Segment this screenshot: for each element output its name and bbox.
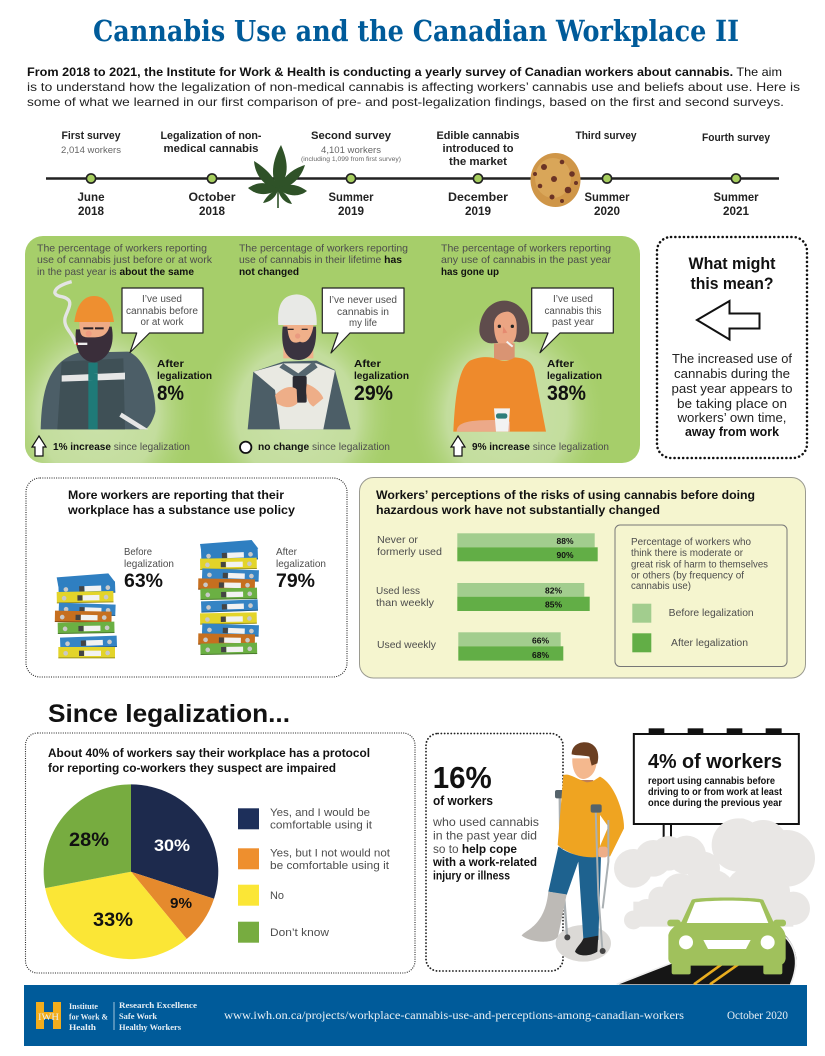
timeline dates: Summer: [328, 192, 374, 204]
text: panel 1 description: [37, 242, 213, 278]
stat: before legalization 63%: legalization: [124, 558, 174, 570]
heading: since legalization: Since legalization...: [48, 700, 290, 728]
speech bubble 1: or at work: [140, 317, 184, 328]
stat: after legalization 29%: 29%: [354, 382, 393, 405]
explanation text: [672, 352, 793, 439]
timeline labels above: Second survey: [311, 130, 392, 142]
panel: worker use statistics: [25, 236, 640, 463]
panel: impairment reporting protocol: [26, 733, 415, 973]
stat: before legalization 63%: Before: [124, 546, 152, 558]
icon: road: [617, 932, 796, 984]
timeline labels above: Edible cannabis: [436, 130, 520, 142]
intro paragraph: some of what we learned in our first comparison of pre- and post-legalization findings, based on the first and second surveys.: [27, 95, 784, 109]
bar chart: [376, 533, 598, 661]
heading: hazardous work have not substantially changed: [376, 503, 660, 517]
category labels: [376, 534, 442, 651]
timeline dates: 2019: [338, 206, 364, 218]
timeline dates: [78, 192, 759, 218]
stat: after legalization 29%: legalization: [354, 370, 409, 382]
pie labels: [69, 830, 192, 931]
footer: [24, 985, 807, 1046]
legend: Before legalization: [669, 608, 754, 619]
timeline dates: 2018: [199, 206, 226, 218]
timeline dates: Summer: [584, 192, 630, 204]
timeline dates: Summer: [714, 192, 759, 204]
text: 9% increase since legalization: 9% increase since legalization: [472, 441, 609, 453]
heading: More workers are reporting that their: [68, 488, 284, 502]
pie legend: No: [270, 890, 284, 902]
pie legend: comfortable using it: [270, 820, 372, 832]
explanation text: be taking place on: [677, 397, 787, 411]
timeline dates: 2021: [723, 206, 750, 218]
billboard text: report using cannabis before: [648, 776, 775, 787]
speech bubble 1: [122, 288, 203, 352]
timeline labels above: introduced to: [442, 143, 514, 155]
speech bubble 1: I’ve used: [142, 294, 182, 305]
speech bubble 2: [322, 288, 404, 353]
label: of workers: of workers: [433, 794, 493, 808]
bar labels: 82%: [545, 586, 562, 596]
explanation text: cannabis during the: [674, 367, 790, 381]
bar labels: [532, 536, 574, 660]
intro paragraph: From 2018 to 2021, the Institute for Work & Health is conducting a yearly survey of Canadian workers about cannabis. The aim: [27, 65, 782, 79]
pie legend: [238, 807, 390, 943]
icon: worker with white cap and phone: [248, 294, 351, 429]
timeline sublabels: [61, 145, 401, 163]
icon: binder stack before: [55, 573, 117, 658]
stat: after legalization 38%: [547, 358, 602, 405]
text: panel 2 description: The percentage of workers reporting: [239, 242, 408, 254]
timeline sublabels: 2,014 workers: [61, 145, 121, 156]
icon: binder stack after: [198, 540, 259, 655]
explanation text: past year appears to: [672, 382, 793, 396]
heading: [688, 255, 776, 293]
icon: cannabis leaf: [248, 145, 307, 208]
logo: Healthy Workers: [119, 1023, 181, 1032]
icon: exhaust smoke clouds: [614, 818, 815, 929]
speech bubble 3: [532, 288, 613, 353]
panel: perceptions of risk: [360, 478, 806, 678]
stat: before legalization 63%: [124, 546, 174, 592]
description: in the past year did: [433, 828, 537, 842]
icon: circle, no change: [240, 442, 251, 453]
stat: after legalization 79%: After: [276, 546, 297, 558]
billboard: [634, 728, 799, 838]
timeline labels above: Legalization of non-: [160, 130, 262, 142]
heading: workplace has a substance use policy: [67, 503, 295, 517]
timeline nodes: [86, 174, 741, 183]
text: panel 2 description: use of cannabis in their lifetime has: [239, 254, 402, 266]
heading: for reporting co-workers they suspect are impaired: [48, 761, 336, 775]
icon: left arrow: [697, 301, 760, 340]
timeline sublabels: (including 1,099 from first survey): [301, 157, 401, 163]
panel: substance use policy: [26, 478, 347, 677]
stat: after legalization 8%: legalization: [157, 370, 212, 382]
category labels: Used less: [376, 585, 420, 597]
stat: before legalization 63%: 63%: [124, 571, 163, 592]
logo: Health: [69, 1023, 97, 1032]
pie chart: [44, 784, 218, 959]
stat: after legalization 8%: [157, 358, 212, 405]
timeline labels above: Fourth survey: [702, 132, 771, 144]
category labels: Used weekly: [377, 639, 437, 651]
description: [432, 815, 539, 882]
text: panel 1 description: use of cannabis just before or at work: [37, 254, 213, 266]
heading: [48, 746, 370, 775]
text: panel 1 description: in the past year is about the same: [37, 266, 194, 278]
heading: About 40% of workers say their workplace has a protocol: [48, 746, 370, 760]
explanation text: away from work: [685, 425, 779, 439]
icon: up arrow, 9% increase: [451, 436, 465, 456]
description: who used cannabis: [432, 815, 539, 829]
timeline dates: October: [188, 192, 236, 204]
stat: after legalization 79%: legalization: [276, 558, 326, 570]
url: www.iwh.on.ca/projects/workplace-cannabis-use-and-perceptions-among-canadian-workers: [224, 1010, 685, 1022]
pie labels: 33%: [93, 910, 133, 931]
stat: after legalization 38%: 38%: [547, 382, 586, 405]
text: panel 1 description: The percentage of workers reporting: [37, 242, 207, 254]
heading: Workers’ perceptions of the risks of using cannabis before doing: [376, 488, 755, 502]
text: panel 3 description: has gone up: [441, 266, 499, 278]
bar labels: 90%: [556, 550, 574, 560]
legend: cannabis use): [631, 581, 691, 592]
timeline dates: 2019: [465, 206, 491, 218]
stat: after legalization 29%: [354, 358, 409, 405]
billboard text: once during the previous year: [648, 798, 782, 809]
bar labels: 88%: [556, 536, 574, 546]
speech bubble 3: cannabis this: [544, 306, 602, 317]
bar labels: 85%: [545, 600, 562, 610]
stat: after legalization 38%: legalization: [547, 370, 602, 382]
pie legend: Yes, and I would be: [270, 807, 370, 819]
legend: great risk of harm to themselves: [631, 560, 768, 570]
pie labels: 28%: [69, 830, 109, 851]
pie labels: 30%: [154, 836, 190, 855]
legend: or others (by frequency of: [631, 570, 744, 582]
intro paragraph: [27, 65, 800, 109]
pie labels: 9%: [170, 895, 192, 912]
timeline dates: 2020: [594, 206, 620, 218]
text: no change since legalization: no change since legalization: [258, 441, 390, 453]
date: October 2020: [727, 1010, 788, 1022]
timeline labels above: Third survey: [576, 130, 637, 142]
logo: IWH: [38, 1012, 60, 1022]
speech bubble 2: I’ve never used: [329, 295, 397, 306]
icon: worker with hard hat: [41, 282, 155, 429]
category labels: formerly used: [377, 546, 442, 558]
pie legend: Yes, but I not would not: [270, 848, 390, 860]
explanation text: workers’ own time,: [676, 411, 786, 425]
description: with a work-related: [432, 855, 537, 869]
text: panel 2 description: not changed: [239, 266, 299, 278]
timeline labels above: medical cannabis: [164, 143, 258, 155]
logo: Institute: [69, 1002, 98, 1011]
speech bubble 3: past year: [552, 317, 595, 328]
stat: after legalization 38%: After: [547, 358, 574, 370]
icon: woman smoking with coffee: [453, 301, 546, 432]
description: injury or illness: [433, 868, 510, 882]
heading: What might: [688, 255, 776, 273]
stat: after legalization 29%: After: [354, 358, 381, 370]
stat: after legalization 79%: 79%: [276, 571, 315, 592]
timeline labels above: [62, 130, 771, 168]
speech bubble 2: my life: [349, 318, 377, 329]
stat: after legalization 79%: [276, 546, 326, 592]
legend: think there is moderate or: [631, 548, 744, 559]
text: 1% increase since legalization: 1% increase since legalization: [53, 441, 190, 453]
heading: [376, 488, 755, 517]
legend: Percentage of workers who: [631, 537, 751, 548]
speech bubble 2: cannabis in: [337, 307, 389, 318]
icon: green car: [667, 897, 786, 974]
timeline dates: June: [78, 192, 104, 204]
category labels: than weekly: [376, 597, 435, 609]
logo: for Work &: [69, 1012, 108, 1022]
legend: [615, 525, 787, 666]
text: panel 3 description: any use of cannabis in the past year: [441, 254, 612, 266]
timeline labels above: First survey: [62, 130, 121, 142]
logo: Research Excellence: [119, 1001, 197, 1010]
speech bubble 3: I’ve used: [553, 294, 593, 305]
panel: what might this mean: [657, 237, 807, 458]
intro paragraph: is to understand how the legalization of non-medical cannabis is affecting workers’ cannabis use and beliefs about use. Here is: [27, 80, 800, 94]
speech bubble 1: cannabis before: [126, 306, 198, 317]
timeline: [46, 130, 779, 218]
legend: After legalization: [671, 638, 748, 649]
title: Cannabis Use and the Canadian Workplace II: [93, 14, 739, 48]
panel: injury coping: [426, 734, 563, 971]
bar labels: 68%: [532, 650, 549, 660]
icon: man on crutches: [522, 742, 624, 962]
timeline sublabels: 4,101 workers: [321, 145, 381, 156]
category labels: Never or: [377, 534, 419, 546]
logo: Safe Work: [119, 1012, 158, 1021]
icon: cookie: [530, 153, 580, 207]
text: panel 3 description: The percentage of workers reporting: [441, 242, 611, 254]
text: panel 2 description: [239, 242, 408, 278]
timeline dates: 2018: [78, 206, 105, 218]
billboard headline: 4% of workers: [648, 751, 782, 773]
bar labels: 66%: [532, 636, 549, 646]
pie legend: Don’t know: [270, 927, 329, 939]
heading: this mean?: [690, 275, 774, 293]
stat: 16%: 16%: [433, 760, 492, 795]
timeline dates: December: [448, 192, 509, 204]
logo: [36, 1001, 197, 1032]
timeline labels above: the market: [449, 156, 507, 168]
pie legend: be comfortable using it: [270, 860, 389, 872]
stat: after legalization 8%: After: [157, 358, 184, 370]
description: so to help cope: [433, 842, 517, 856]
billboard text: driving to or from work at least: [648, 787, 783, 798]
stat: after legalization 8%: 8%: [157, 382, 184, 405]
text: panel 3 description: [441, 242, 612, 278]
icon: up arrow, 1% increase: [32, 436, 46, 456]
heading: [67, 488, 295, 517]
explanation text: The increased use of: [672, 352, 793, 366]
billboard text: [648, 776, 783, 809]
